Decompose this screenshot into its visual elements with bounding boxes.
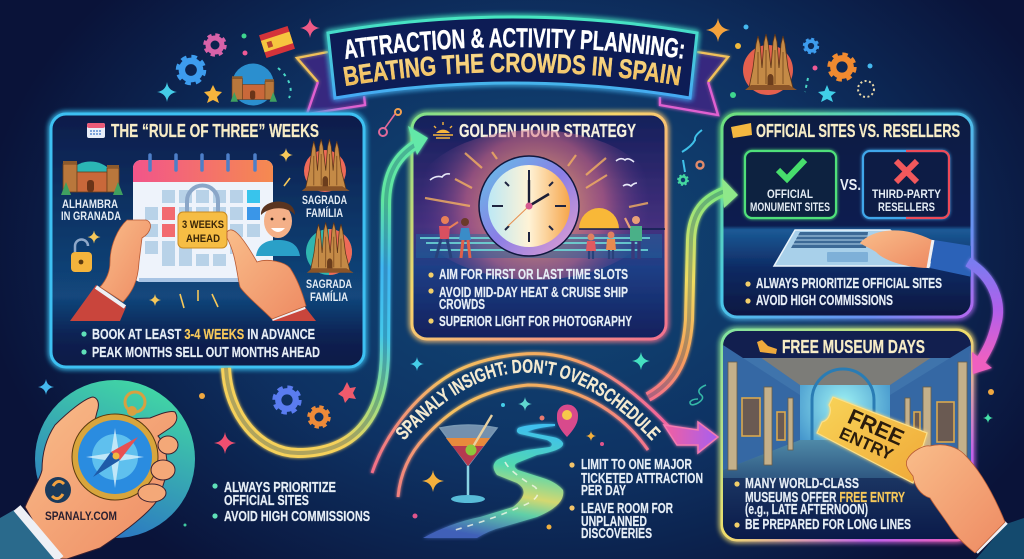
icon: lock with 3 weeks ahead: 3 WEEKS <box>182 219 224 231</box>
panel: official sites vs resellers <box>722 114 972 317</box>
icon: sun <box>433 122 453 138</box>
curved title: SPANALY INSIGHT: DON'T OVERSCHEDULE <box>396 359 662 441</box>
title banner <box>293 10 732 119</box>
bullets: insight: DISCOVERIES <box>581 526 652 542</box>
banner tails <box>297 52 728 115</box>
bullets: CROWDS <box>439 297 485 313</box>
banner body <box>328 17 697 98</box>
people on the beach <box>436 216 642 259</box>
panel: rule of three weeks <box>51 114 364 367</box>
hand <box>25 397 177 559</box>
bullets: (e.g., LATE AFTERNOON) <box>745 502 868 518</box>
bullets: MANY WORLD-CLASS <box>745 476 859 492</box>
heading: FREE MUSEUM DAYS <box>782 337 925 357</box>
vs label: VS. <box>840 177 861 194</box>
calendar <box>133 155 273 282</box>
sparkles <box>88 148 293 308</box>
icon: padlock <box>71 240 92 272</box>
arrow: insight to free museum days <box>664 422 718 453</box>
bullets: insight <box>569 457 703 542</box>
icon: cross <box>896 161 917 182</box>
heading: GOLDEN HOUR STRATEGY <box>459 121 636 141</box>
bullets: MUSEUMS OFFER FREE ENTRY <box>745 490 905 506</box>
compass <box>72 392 158 500</box>
left hand with sleeve <box>70 220 151 321</box>
icon: lock with 3 weeks ahead <box>178 186 227 248</box>
outer arc <box>372 354 672 473</box>
box: official sites: MONUMENT SITES <box>750 202 830 214</box>
free entry ticket <box>817 397 927 483</box>
logo <box>45 477 71 503</box>
bullets: BOOK AT LEAST 3-4 WEEKS IN ADVANCE <box>92 327 315 343</box>
box: third-party resellers: THIRD-PARTY <box>872 189 941 201</box>
compass badge with hand <box>0 380 195 559</box>
bullets: bottom left: OFFICIAL SITES <box>224 493 309 509</box>
top decorations <box>157 18 874 106</box>
bullets: bottom left: AVOID HIGH COMMISSIONS <box>224 509 370 525</box>
panel: free museum days <box>722 330 972 540</box>
bullets: AVOID MID-DAY HEAT & CRUISE SHIP <box>439 285 628 301</box>
label: Sagrada Familia 2: SAGRADA <box>306 279 352 291</box>
icon: ticket <box>731 123 752 138</box>
scene: sunset <box>410 130 665 280</box>
compass badge with hand: SPANALY.COM <box>45 509 117 523</box>
small decorations <box>38 109 994 530</box>
clock <box>479 156 579 256</box>
sleeve <box>0 510 58 559</box>
bullets: insight: LEAVE ROOM FOR <box>581 501 673 517</box>
label: Sagrada Familia 2: FAMÍLIA <box>310 291 348 304</box>
bullets <box>81 327 320 361</box>
arrow: official sites to free museum days <box>968 262 998 374</box>
label: Sagrada Familia 1: SAGRADA <box>302 195 347 207</box>
laptop and hand <box>774 230 972 277</box>
icon: Sagrada Familia 2 <box>306 222 354 275</box>
museum hall scene <box>723 331 971 540</box>
bullets: BE PREPARED FOR LONG LINES <box>745 517 911 533</box>
bullets: PEAK MONTHS SELL OUT MONTHS AHEAD <box>92 345 320 361</box>
hand holding ticket <box>906 445 1024 559</box>
label: Alhambra: ALHAMBRA <box>62 199 118 211</box>
icon: shoe <box>757 340 777 354</box>
icon: Sagrada Familia 1 <box>302 139 350 192</box>
bullets: AVOID HIGH COMMISSIONS <box>756 293 893 309</box>
label: Sagrada Familia 2 <box>306 279 352 304</box>
box: third-party resellers: RESELLERS <box>878 202 935 214</box>
bullets <box>734 476 911 533</box>
bullets: insight: LIMIT TO ONE MAJOR <box>581 457 692 473</box>
bullets: insight: UNPLANNED <box>581 514 647 530</box>
inner arc <box>398 385 648 497</box>
label: Alhambra <box>61 199 121 223</box>
icon: map pin <box>557 405 578 437</box>
bullets: bottom left: ALWAYS PRIORITIZE <box>224 480 336 496</box>
person <box>256 201 300 256</box>
label: Sagrada Familia 1: FAMÍLIA <box>306 207 343 220</box>
title text: ATTRACTION & ACTIVITY PLANNING: <box>345 28 684 60</box>
icon: lock with 3 weeks ahead: AHEAD <box>186 233 220 245</box>
arrow: to official sites <box>648 178 738 397</box>
box: official sites: OFFICIAL <box>767 189 813 201</box>
label: Sagrada Familia 1 <box>302 195 347 220</box>
icon: Alhambra <box>61 161 123 195</box>
icon: Spanish flag <box>259 26 295 58</box>
insight arc heading <box>368 350 673 500</box>
heading <box>87 121 319 141</box>
title text <box>343 28 684 86</box>
title text: BEATING THE CROWDS IN SPAIN <box>343 53 682 86</box>
icon: check <box>778 160 805 179</box>
label: Alhambra: IN GRANADA <box>61 211 121 223</box>
arrow: rainbow arrow to golden hour <box>226 126 428 453</box>
free entry ticket: FREE <box>844 404 908 451</box>
box: third-party resellers <box>863 151 949 218</box>
heading <box>731 121 960 141</box>
panel: golden hour strategy <box>410 114 666 339</box>
heading <box>432 121 637 145</box>
bullets: SUPERIOR LIGHT FOR PHOTOGRAPHY <box>439 314 632 330</box>
icon: cocktail glass <box>440 415 497 503</box>
bullets: ALWAYS PRIORITIZE OFFICIAL SITES <box>756 276 942 292</box>
bullets <box>745 276 942 309</box>
winding road <box>423 424 563 538</box>
bullets: bottom left <box>212 480 370 525</box>
icon: small calendar <box>87 123 105 138</box>
bullets <box>428 267 632 330</box>
free entry ticket: ENTRY <box>836 424 897 465</box>
box: official sites <box>745 151 836 218</box>
bullets: insight: PER DAY <box>581 483 626 499</box>
bullets: insight: TICKETED ATTRACTION <box>581 471 703 487</box>
heading <box>757 337 925 357</box>
fingers <box>138 436 178 502</box>
right hand with sleeve <box>227 230 316 321</box>
heading: THE “RULE OF THREE” WEEKS <box>111 121 319 141</box>
bullets: AIM FOR FIRST OR LAST TIME SLOTS <box>439 267 628 283</box>
